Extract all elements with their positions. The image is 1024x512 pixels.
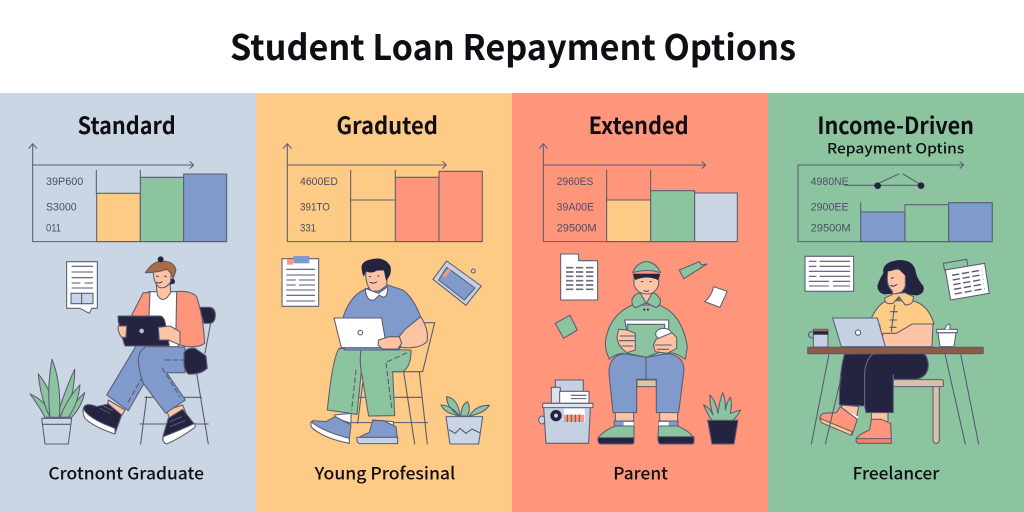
label: parent: Parent — [613, 459, 668, 484]
bar chart: graduated — [283, 144, 482, 242]
subheading: Repayment Optins — [827, 138, 965, 158]
icon: wall document — [805, 256, 854, 291]
desk — [808, 347, 983, 444]
illustration: graduate with tablet — [30, 256, 215, 444]
bar chart: standard: 39P600 — [46, 176, 83, 188]
stool — [891, 380, 943, 444]
icon: potted plant — [441, 397, 489, 444]
bar chart: graduated: 4600ED — [300, 176, 338, 188]
icon: spreadsheet document — [561, 254, 598, 300]
floating papers — [555, 262, 727, 338]
bar chart: extended: 2960ES — [557, 176, 593, 188]
icon: tablet — [433, 261, 481, 305]
icon: document — [67, 262, 97, 313]
icon: laptop — [833, 318, 885, 347]
icon: office printer — [539, 380, 593, 443]
bar chart: graduated: 331 — [300, 222, 316, 234]
bar chart: extended: 29500M — [557, 222, 597, 234]
label: young professional: Young Profesinal — [314, 459, 455, 484]
icon: potted plant — [704, 393, 741, 444]
bar chart: income-driven — [798, 162, 992, 242]
icon: clipboard document — [282, 256, 319, 306]
bar chart: graduated: 391TO — [300, 201, 330, 213]
panel: income-driven — [768, 93, 1024, 512]
bar chart: standard: S3000 — [46, 201, 77, 213]
person — [311, 258, 427, 444]
bar chart: standard — [29, 144, 227, 242]
title: Student Loan Repayment Options — [230, 20, 796, 71]
person — [83, 256, 207, 444]
heading: extended: Extended — [589, 107, 689, 141]
icon: mug — [808, 329, 828, 347]
stool — [351, 323, 435, 444]
bar chart: extended: 39A00E — [557, 201, 594, 213]
heading: income-driven: Income-Driven — [817, 107, 974, 141]
chair — [140, 307, 215, 444]
icon: plant — [30, 359, 85, 444]
bar chart: extended — [539, 144, 737, 242]
panel: standard — [0, 93, 256, 512]
illustration: freelancer at desk — [805, 256, 989, 444]
heading: graduated: Graduted — [336, 107, 438, 141]
illustration: parent with tablet — [539, 254, 741, 444]
heading: standard: Standard — [78, 107, 176, 141]
bar chart: income-driven: 2900EE — [811, 201, 849, 213]
bar chart: standard: 011 — [46, 222, 61, 234]
bar chart: income-driven: 29500M — [811, 222, 851, 234]
bar chart: income-driven: 4980NE — [811, 176, 849, 188]
icon: spreadsheet page — [943, 259, 989, 300]
person — [820, 260, 934, 443]
person — [598, 259, 694, 444]
illustration: young professional with laptop — [282, 256, 489, 444]
stool — [637, 380, 656, 387]
panel: extended — [512, 93, 768, 512]
icon: takeaway cup — [937, 324, 957, 347]
label: freelancer: Freelancer — [853, 459, 939, 484]
label: graduate: Crotnont Graduate — [48, 459, 204, 484]
panel: graduated — [256, 93, 512, 512]
